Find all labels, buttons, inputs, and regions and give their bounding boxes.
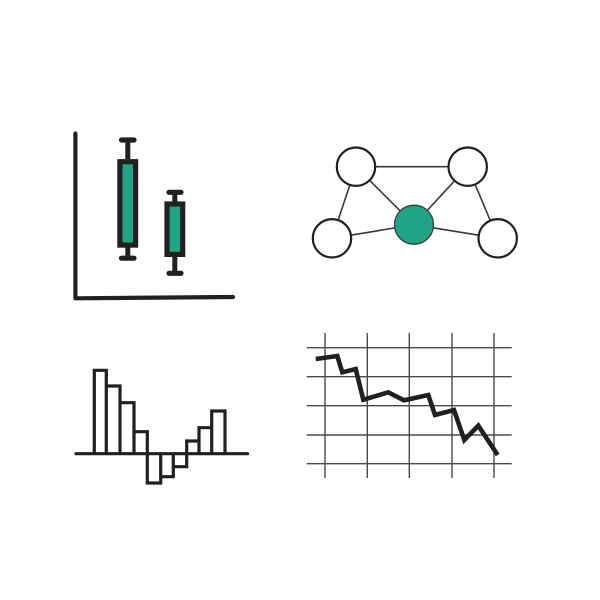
baseline [76, 452, 248, 455]
panel: network diagram [313, 148, 517, 258]
network links [332, 167, 498, 238]
grid [307, 333, 512, 478]
node: top right [448, 148, 487, 186]
node: bottom left [313, 219, 351, 258]
node: top left [337, 148, 375, 186]
chart axes [75, 134, 233, 298]
candlestick: tall [120, 140, 136, 258]
candlestick: short [167, 192, 183, 273]
node: bottom right [478, 219, 517, 258]
node: central green [394, 205, 434, 244]
declining line [316, 356, 498, 455]
panel: candlestick chart [75, 134, 233, 298]
panel: diverging bar chart [76, 370, 248, 483]
bars [94, 370, 225, 483]
panel: declining line chart [307, 333, 512, 478]
